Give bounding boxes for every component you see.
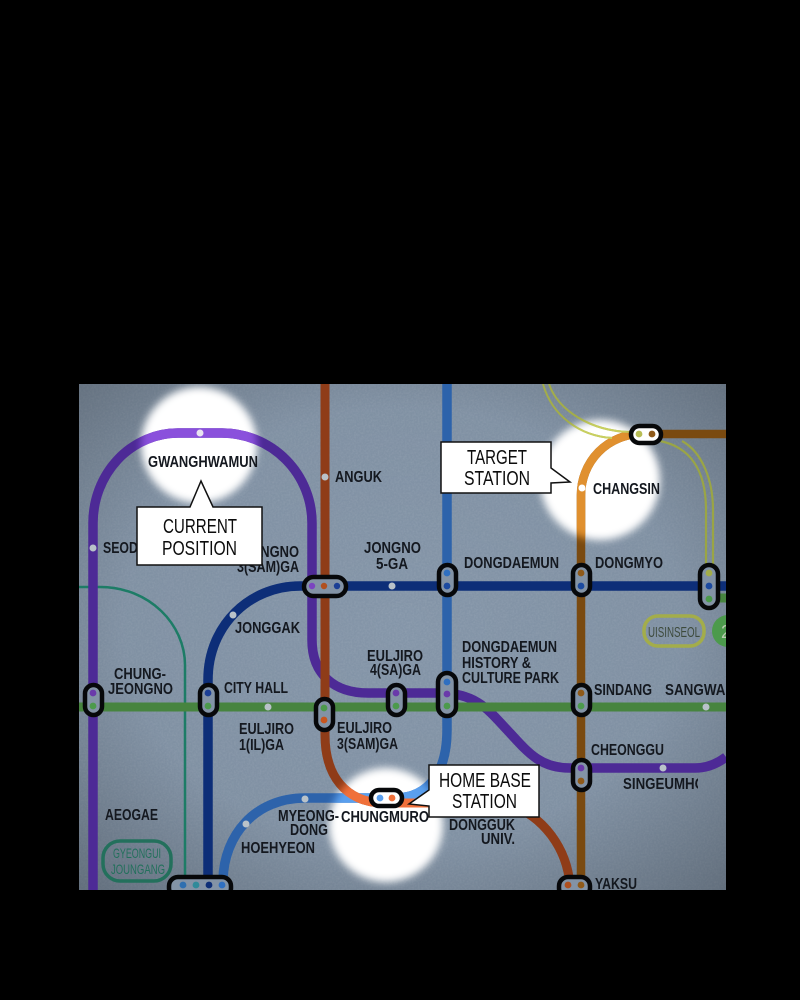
station labels: JEONGNO: [108, 681, 173, 698]
interchange stations: [85, 426, 718, 897]
station labels: EULJIRO: [239, 721, 294, 738]
Euljiro 4(sa)ga interchange: [388, 685, 405, 715]
spotlights: [141, 387, 660, 882]
station labels: DONG: [290, 822, 328, 839]
station labels: YAKSU: [595, 876, 637, 893]
Sindang interchange: [573, 685, 590, 715]
top right interchange: [631, 426, 661, 443]
callout: home base station: [409, 765, 539, 817]
station labels: DONGGUK: [449, 817, 515, 834]
lit line segments: [136, 420, 630, 808]
Yaksu interchange: [559, 877, 590, 897]
station labels: SINGEUMHO: [623, 776, 705, 793]
minor station dots: [90, 430, 710, 828]
station labels: JONGNO: [364, 540, 421, 557]
station labels: DONGDAEMUN: [464, 555, 559, 572]
station labels: 1(IL)GA: [239, 737, 284, 754]
line badge: line 2: [712, 615, 726, 647]
callout: current position: POSITION: [162, 538, 237, 560]
line badge: Gyeongui Joungang: GYEONGUI: [113, 845, 161, 861]
station labels: SEODAEMUN: [103, 540, 183, 557]
label: Chungmuro: CHUNGMURO: [341, 809, 429, 826]
callout: target station: [441, 442, 570, 493]
station labels: JONGNO: [243, 544, 299, 561]
station labels: 4(SA)GA: [370, 662, 421, 679]
line badge: Uisinseol: [644, 616, 704, 646]
callout: current position: [137, 481, 262, 565]
station labels: CULTURE PARK: [462, 670, 559, 687]
Chungjeongno interchange: [85, 685, 102, 715]
station labels: CHANGSIN: [593, 481, 660, 498]
station labels: HISTORY &: [462, 655, 531, 672]
Dongdaemun interchange: [439, 565, 456, 595]
line badge: Uisinseol: UISINSEOL: [648, 624, 700, 641]
station labels: 3(SAM)GA: [337, 736, 398, 753]
station labels: CITY HALL: [224, 680, 288, 697]
station labels: ANGUK: [335, 469, 382, 486]
station labels: SINDANG: [594, 682, 652, 699]
Dongmyo interchange: [573, 565, 590, 595]
Jongno 3(sam)ga interchange: [304, 577, 346, 596]
station labels: CHUNG-: [114, 666, 166, 683]
callout: home base station: STATION: [452, 791, 517, 813]
callout: current position: CURRENT: [163, 516, 237, 538]
Euljiro 3(sam)ga interchange: [316, 699, 333, 730]
Seoul Station interchange: [166, 874, 234, 890]
DDP interchange: [438, 673, 456, 716]
City Hall interchange: [200, 685, 217, 715]
line badge: Gyeongui Joungang: JOUNGANG: [111, 861, 165, 877]
callout: home base station: HOME BASE: [439, 770, 531, 792]
station labels: 5-GA: [376, 556, 408, 573]
station labels: AEOGAE: [105, 807, 158, 824]
station labels: JONGGAK: [235, 620, 300, 637]
callout: target station: TARGET: [467, 447, 527, 469]
station labels: UNIV.: [481, 831, 515, 848]
station labels: EULJIRO: [367, 648, 423, 665]
Chungmuro interchange: [371, 790, 402, 806]
station labels: [103, 454, 783, 893]
station labels: 3(SAM)GA: [237, 559, 299, 576]
line badge: Gyeongui Joungang: [103, 841, 171, 881]
callout: target station: STATION: [464, 468, 530, 490]
paper noise texture: [79, 384, 726, 890]
station labels: HOEHYEON: [241, 840, 315, 857]
map panel: [79, 384, 783, 897]
station labels: DONGMYO: [595, 555, 663, 572]
line badge: line 2: 2: [721, 622, 731, 642]
station labels: MYEONG-: [278, 808, 339, 825]
station labels: DONGDAEMUN: [462, 639, 557, 656]
Cheonggu interchange: [573, 760, 590, 790]
station labels: GWANGHWAMUN: [148, 454, 258, 471]
map background: [79, 384, 726, 890]
vignette: [79, 384, 726, 890]
subway lines: [79, 384, 726, 890]
Sinseol-dong interchange: [700, 565, 718, 608]
station labels: CHEONGGU: [591, 742, 664, 759]
station labels: EULJIRO: [337, 720, 392, 737]
